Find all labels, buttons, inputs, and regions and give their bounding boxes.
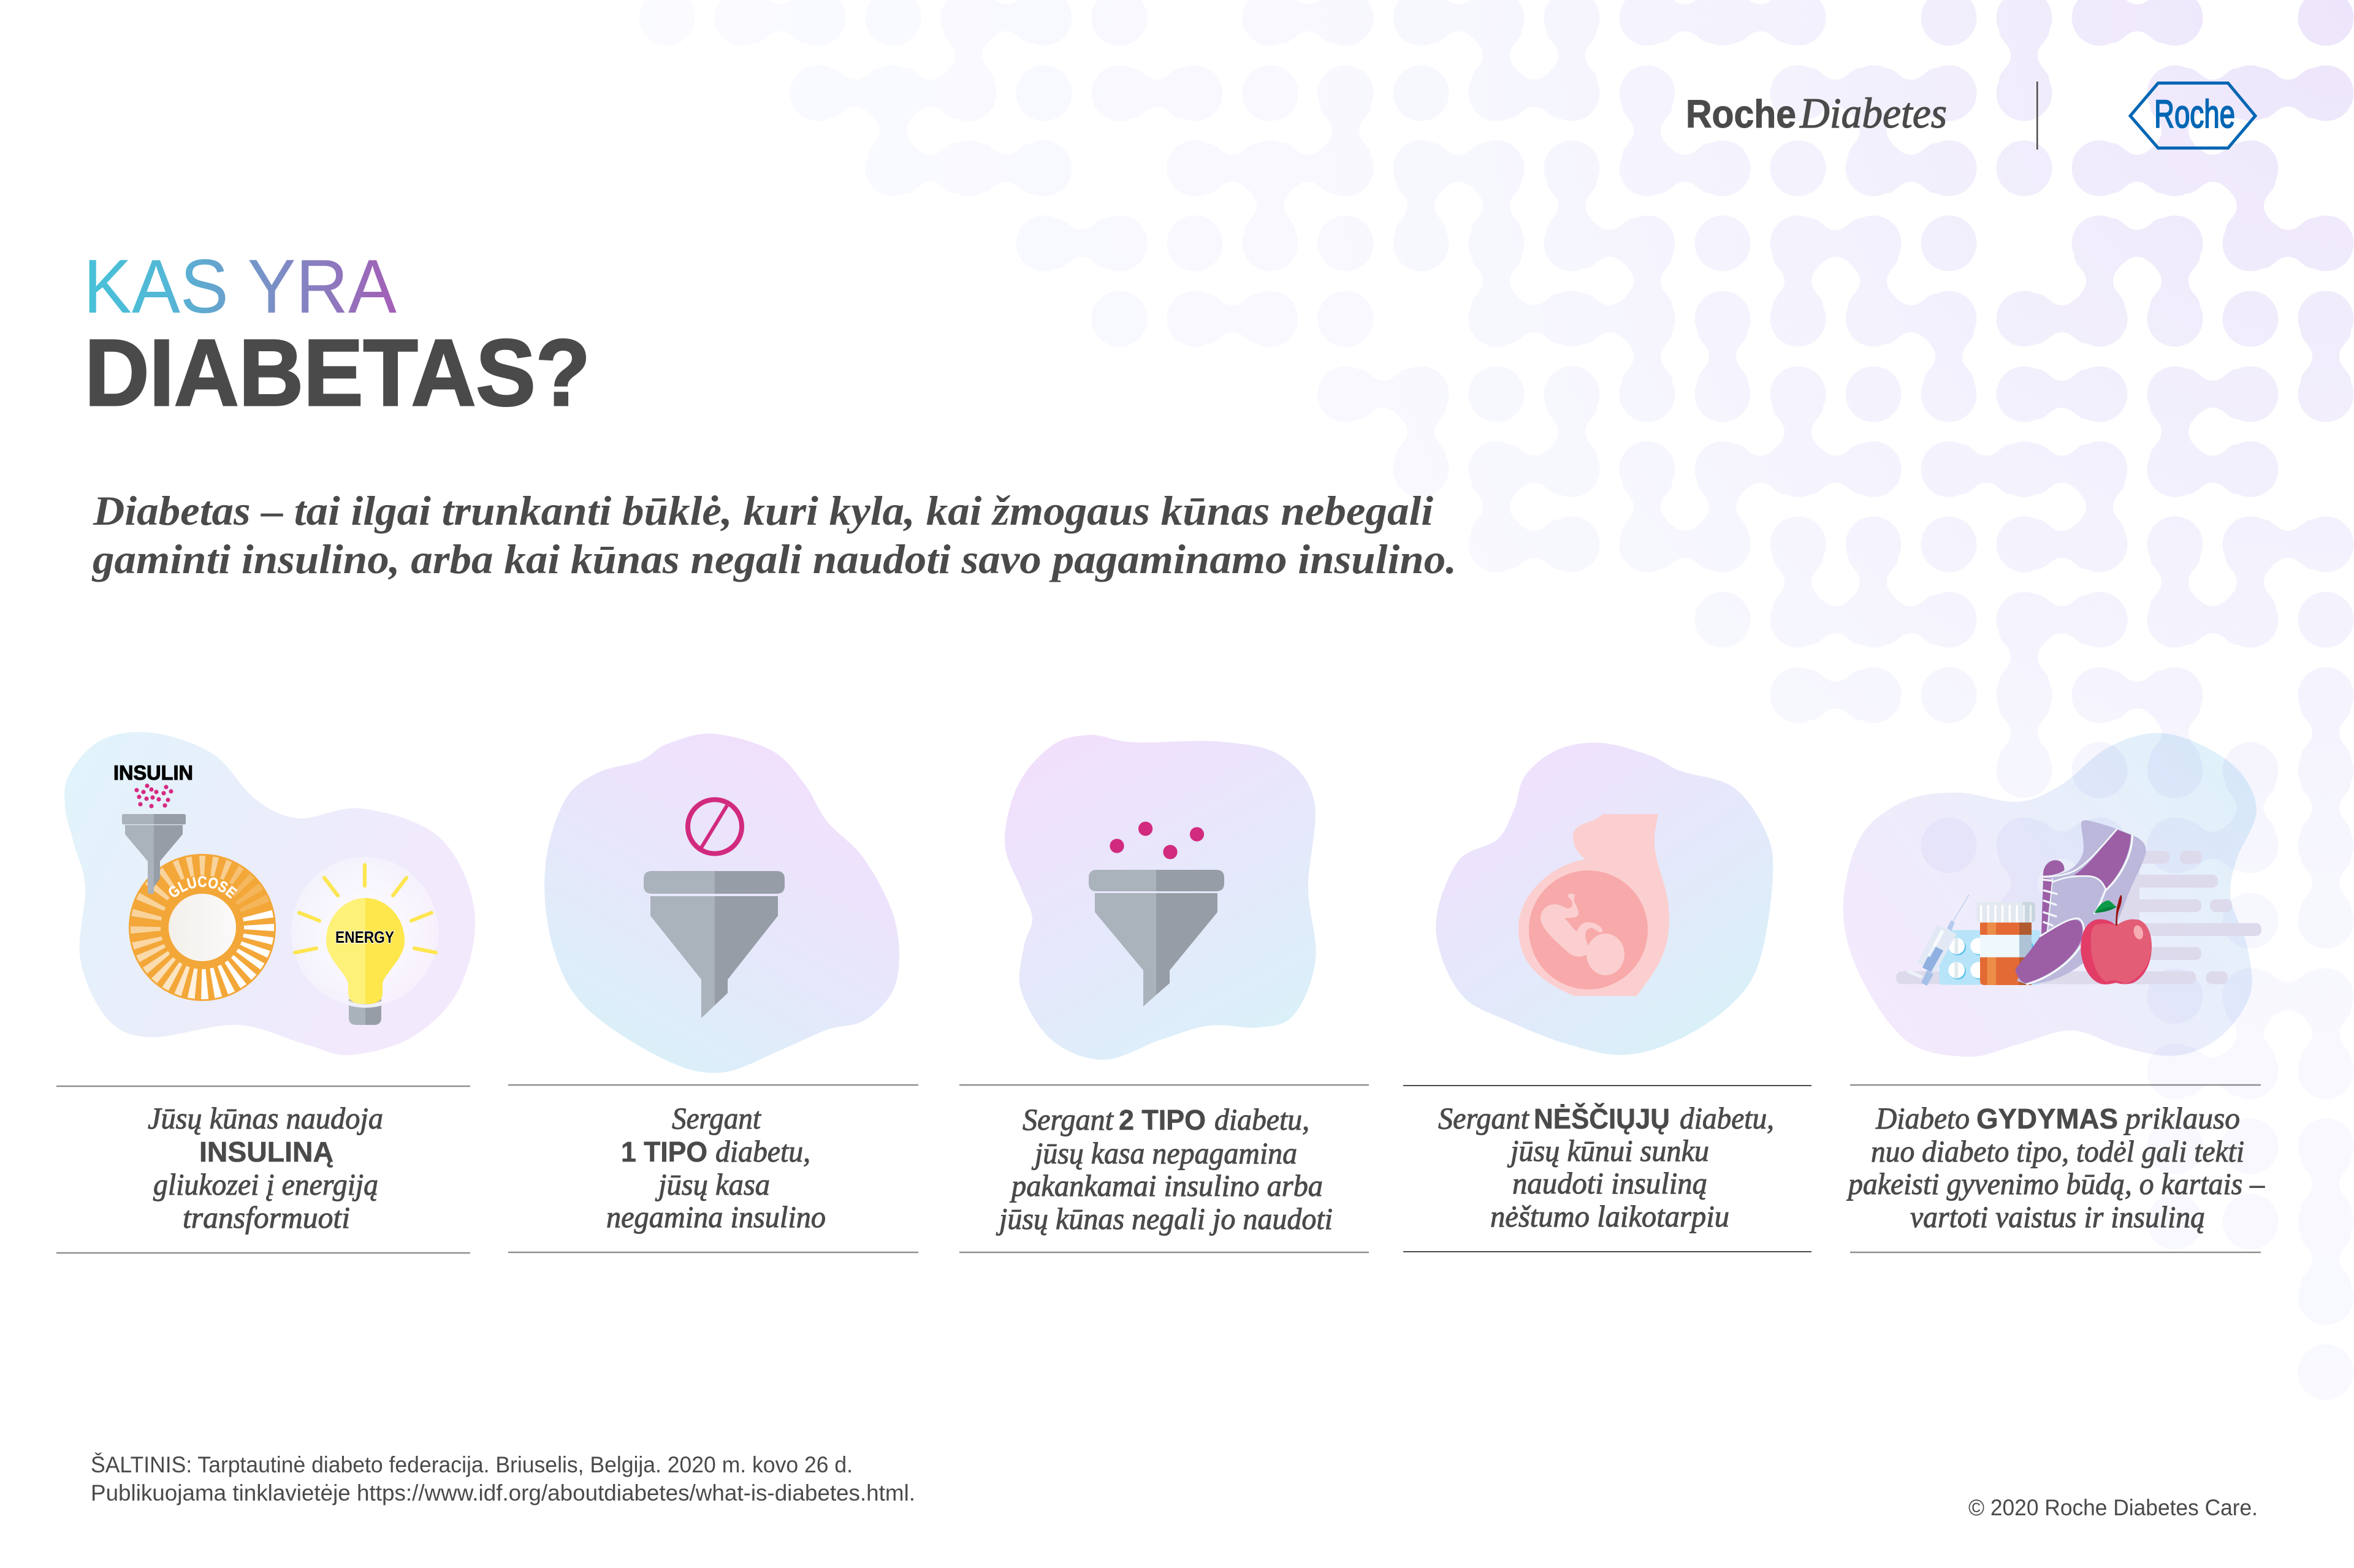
blob background 5 (1843, 733, 2257, 1057)
icon: glucose disc: GLUCOSE (169, 876, 238, 899)
source note: ŠALTINIS: Tarptautinė diabeto federacija. Briuselis, Belgija. 2020 m. kovo 26 d. (91, 1452, 853, 1477)
panel: insulin turns glucose into energy (56, 732, 475, 1254)
caption 2: 1 TIPO (621, 1136, 707, 1168)
blob background 2 (544, 734, 899, 1073)
caption 3: jūsų kasa nepagamina (1031, 1136, 1297, 1170)
source note (91, 1452, 915, 1505)
caption 5: Diabeto (1875, 1101, 1970, 1135)
caption 5: vartoti vaistus ir insuliną (1910, 1200, 2205, 1234)
label: insulin: INSULIN (113, 761, 193, 784)
panel: type 1 diabetes (508, 734, 918, 1252)
caption 1 (148, 1101, 383, 1235)
caption 2: diabetu, (715, 1134, 810, 1168)
blob background 4 (1436, 742, 1773, 1055)
icon: funnel (644, 871, 785, 1018)
caption 4: diabetu, (1680, 1101, 1774, 1135)
panel: gestational diabetes (1403, 742, 1811, 1252)
caption 1: gliukozei į energiją (153, 1167, 378, 1201)
panel: treatment (1843, 733, 2265, 1252)
intro paragraph: gaminti insulino, arba kai kūnas negali naudoti savo pagaminamo insulino. (91, 536, 1457, 582)
icon: glucose disc (129, 854, 276, 1001)
title: KAS YRA (83, 245, 397, 329)
icon: pill bottle (1976, 902, 2035, 985)
icon: apple (2081, 895, 2152, 984)
title: DIABETAS? (85, 320, 590, 425)
blob background 1 (64, 732, 475, 1055)
intro paragraph (91, 487, 1457, 582)
caption 3: pakankamai insulino arba (1010, 1168, 1323, 1203)
caption 4 (1438, 1101, 1774, 1233)
logo: Roche Diabetes: Roche (1686, 92, 1796, 136)
logo: Roche Diabetes: Diabetes (1799, 90, 1947, 137)
caption 1: transformuoti (183, 1200, 350, 1235)
icon: pregnant belly with fetus (1518, 814, 1669, 996)
caption 5: priklauso (2124, 1101, 2240, 1135)
copyright: © 2020 Roche Diabetes Care. (1968, 1495, 2258, 1520)
icon: running shoe (2015, 820, 2146, 984)
caption 4: jūsų kūnui sunku (1507, 1133, 1709, 1168)
caption 2: Sergant (672, 1101, 761, 1135)
caption 3 (996, 1102, 1333, 1236)
caption 5: pakeisti gyvenimo būdą, o kartais – (1846, 1166, 2265, 1201)
icon: light bulb: ENERGY (335, 928, 394, 946)
caption 5: GYDYMAS (1976, 1103, 2118, 1135)
panel: type 2 diabetes (959, 735, 1369, 1252)
icon: funnel (1089, 870, 1224, 1007)
icon: no insulin sign (688, 799, 742, 853)
caption 4: Sergant (1438, 1101, 1529, 1135)
logo: Roche hexagon (2130, 83, 2255, 148)
icon: blister pack (1939, 930, 2040, 985)
source note: Publikuojama tinklavietėje https://www.idf.org/aboutdiabetes/what-is-diabetes.html. (91, 1480, 915, 1505)
caption 3: jūsų kūnas negali jo naudoti (996, 1201, 1333, 1236)
icon: light bulb (291, 857, 438, 1025)
icon: small funnel (122, 814, 186, 896)
caption 3: Sergant (1023, 1102, 1114, 1136)
caption 3: diabetu, (1214, 1102, 1309, 1136)
caption 1: INSULINĄ (199, 1136, 333, 1168)
logo: Roche Diabetes (1686, 90, 1947, 137)
icon: motion lines (1896, 851, 2261, 984)
caption 5: nuo diabeto tipo, todėl gali tekti (1871, 1134, 2244, 1168)
logo: Roche hexagon: Roche (2154, 92, 2235, 136)
icon: treatment items (1907, 820, 2152, 986)
title (83, 245, 590, 425)
caption 2 (606, 1101, 826, 1234)
caption 2: negamina insulino (606, 1200, 826, 1234)
caption 4: nėštumo laikotarpiu (1490, 1199, 1729, 1233)
blob background 3 (1005, 735, 1316, 1060)
icon: syringe (1907, 894, 1969, 986)
caption 4: NĖŠČIŲJŲ (1534, 1103, 1670, 1135)
caption 5 (1846, 1101, 2265, 1234)
icon: few insulin particles (1110, 821, 1204, 859)
caption 3: 2 TIPO (1119, 1104, 1206, 1136)
caption 2: jūsų kasa (655, 1167, 770, 1201)
intro paragraph: Diabetas – tai ilgai trunkanti būklė, kuri kyla, kai žmogaus kūnas nebegali (93, 487, 1433, 534)
icon: insulin particles (134, 783, 173, 809)
caption 4: naudoti insuliną (1512, 1166, 1707, 1200)
caption 1: Jūsų kūnas naudoja (148, 1101, 383, 1135)
